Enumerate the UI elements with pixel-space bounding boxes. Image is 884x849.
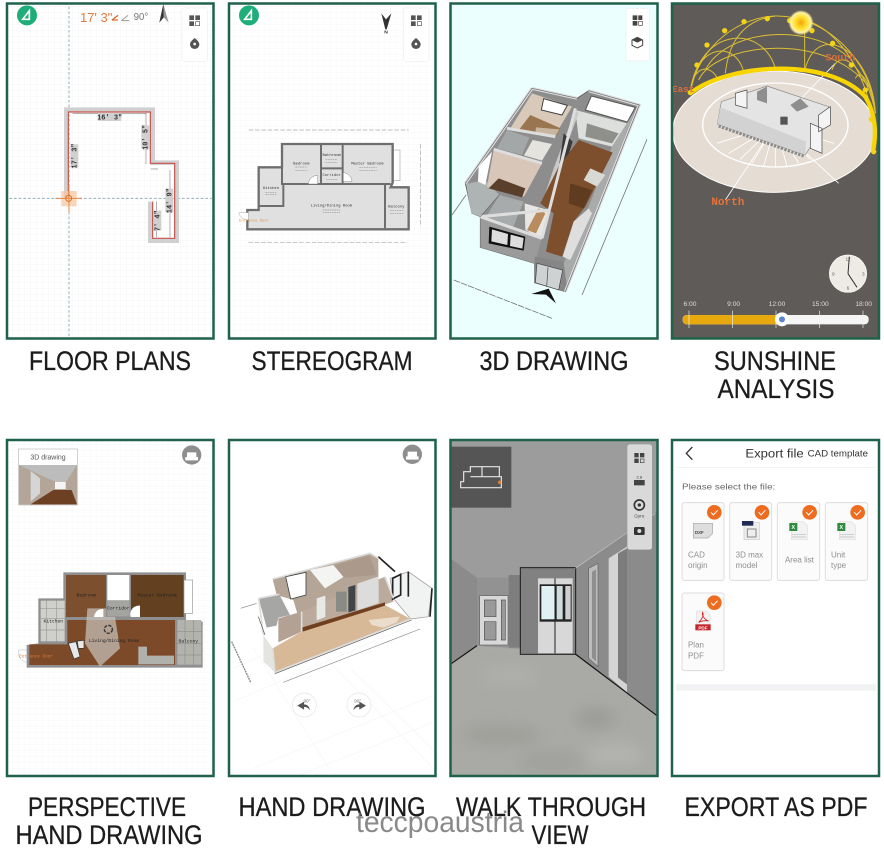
toolbar: [627, 444, 652, 550]
wall drawing: 16' 3": [97, 114, 122, 122]
compass labels: East: [672, 84, 694, 95]
header: [676, 447, 876, 467]
frame: [7, 440, 214, 776]
minimap: [450, 447, 511, 508]
floor grid: [233, 578, 435, 775]
time slider: 18:00: [855, 301, 872, 308]
label: walk through view: [456, 792, 646, 849]
panel: 3D drawing: [450, 4, 658, 338]
icon: sun: [788, 10, 814, 35]
compass labels: [672, 53, 855, 209]
card: unit type: X: [840, 525, 844, 531]
textured floor plan: [18, 572, 203, 668]
time slider: 12:00: [769, 301, 786, 308]
dimension lines: [232, 603, 420, 682]
frame: [7, 4, 214, 338]
toolbar: [182, 8, 207, 61]
card: 3D max model: [730, 503, 772, 580]
toolbar: 2.8: [637, 475, 643, 480]
icon: direction arrow: [531, 289, 556, 303]
base arc: [690, 69, 875, 153]
icon: app logo: [239, 5, 259, 25]
panel: floor plans: [7, 4, 214, 338]
textured floor plan: Corridor: [107, 605, 130, 611]
label: 3D drawing: 3D DRAWING: [480, 346, 628, 376]
time slider: 15:00: [812, 301, 829, 308]
origin marker: [55, 185, 82, 212]
3D model: [717, 86, 830, 156]
textured floor plan: Bedroom: [77, 593, 96, 599]
card: area list: X: [792, 525, 796, 531]
card: CAD origin: DXF: [695, 530, 704, 535]
wall drawing: 10' 5": [142, 125, 150, 150]
3D drawing thumbnail: [19, 449, 77, 505]
button: rotate right: [347, 693, 371, 717]
frame: [450, 4, 658, 338]
floor plan drawing: Corridor: [322, 173, 341, 178]
card: area list: [777, 503, 820, 580]
wall drawing: 14' 9": [166, 188, 174, 213]
icon: sofa button: [403, 445, 422, 464]
footer band: [676, 684, 876, 691]
toolbar: [626, 8, 650, 61]
watermark: teccpoaustria: [356, 806, 524, 839]
measurement readout: 90°: [134, 12, 148, 23]
wall drawing: [66, 110, 177, 241]
floor plan drawing: Bedroom: [293, 161, 310, 166]
label: walk through view: WALK THROUGH: [456, 792, 646, 822]
card: CAD origin: origin: [688, 561, 708, 570]
card: area list: Area list: [785, 556, 815, 565]
frame: [450, 440, 658, 776]
label: sunshine analysis: SUNSHINE: [714, 346, 836, 376]
header: CAD template: [808, 449, 868, 459]
floor plan drawing: Bathroom: [322, 153, 342, 158]
icon: clock: [829, 255, 867, 292]
toolbar: [404, 8, 429, 61]
label: stereogram: STEREOGRAM: [252, 346, 412, 376]
sun dial plate: [673, 63, 876, 200]
compass labels: South: [825, 53, 855, 64]
button: rotate left: 90°: [303, 699, 311, 704]
card: unit type: [825, 503, 868, 580]
textured floor plan: Entrance Door: [19, 655, 53, 660]
icon: app logo: [17, 5, 37, 25]
icon: clock: 9: [832, 271, 835, 276]
card: plan PDF: PDF: [688, 651, 704, 660]
floor plan drawing: Kitchen: [263, 186, 279, 191]
card: 3D max model: 3D max: [736, 550, 763, 559]
sun positions: [688, 16, 876, 154]
wall drawing: 17' 3": [71, 143, 79, 169]
measurement readout: 17' 3": [80, 10, 113, 25]
dimension lines: [452, 139, 647, 318]
room perspective: [450, 440, 659, 777]
panel: export as PDF: [672, 440, 879, 776]
label: floor plans: FLOOR PLANS: [29, 346, 191, 376]
guide lines: [9, 7, 212, 338]
card: CAD origin: [682, 503, 724, 580]
icon: north compass: [381, 13, 391, 35]
prompt text: Please select the file:: [682, 482, 775, 492]
measurement readout: [80, 10, 148, 25]
time slider: 6:00: [684, 301, 697, 308]
icon: clock: 12: [846, 257, 851, 262]
card: plan PDF: [682, 593, 724, 671]
floor plan drawing: Master Bedroom: [351, 161, 384, 166]
label: perspective hand drawing: PERSPECTIVE: [28, 792, 186, 822]
label: sunshine analysis: ANALYSIS: [718, 374, 834, 404]
icon: north compass: N: [384, 29, 388, 35]
frame: [229, 440, 436, 776]
card: unit type: Unit: [831, 550, 846, 559]
button: rotate left: [292, 693, 316, 717]
floor plan drawing: Entrance Door: [239, 219, 269, 223]
label: hand drawing: HAND DRAWING: [238, 792, 426, 822]
textured floor plan: Living/Dining Room: [89, 638, 139, 644]
time slider: 9:00: [727, 301, 740, 308]
toolbar: Gyro: [634, 513, 645, 518]
textured floor plan: Balcony: [179, 639, 198, 645]
floor plan drawing: Living/Dining Room: [311, 203, 353, 208]
frame: [672, 4, 879, 338]
floor plan drawing: Balcony: [388, 204, 405, 209]
frame: [672, 440, 879, 776]
card: plan PDF: Plan: [688, 641, 704, 650]
panel: stereogram: [229, 4, 436, 338]
floor plan drawing: [239, 130, 421, 243]
panel: walk through view: [450, 440, 659, 777]
icon: compass: [159, 4, 169, 23]
panel: sunshine analysis: [672, 4, 879, 338]
frame: [229, 4, 436, 338]
panel: hand drawing: [229, 440, 436, 776]
card: CAD origin: CAD: [688, 550, 705, 559]
icon: clock: 6: [847, 285, 850, 290]
textured floor plan: Kitchen: [44, 619, 63, 625]
header: Export file: [745, 447, 804, 461]
icon: clock: 3: [862, 271, 865, 276]
time slider: [683, 301, 872, 328]
card: 3D max model: model: [736, 561, 758, 570]
icon: sofa button: [182, 445, 201, 465]
compass labels: North: [711, 197, 744, 209]
button: rotate right: 90°: [354, 699, 361, 704]
3D model: [465, 88, 639, 292]
wall drawing: 7' 4": [154, 210, 162, 231]
card: plan PDF: PDF: [698, 625, 708, 630]
card: unit type: type: [831, 561, 847, 570]
label: sunshine analysis: [714, 346, 836, 404]
panel: perspective hand drawing: [7, 440, 214, 776]
sun path dome: [690, 16, 875, 113]
textured floor plan: Master Bedroom: [137, 593, 177, 599]
label: perspective hand drawing: [16, 792, 202, 849]
3D drawing thumbnail: 3D drawing: [30, 455, 66, 462]
3D cutaway model: [258, 553, 432, 674]
